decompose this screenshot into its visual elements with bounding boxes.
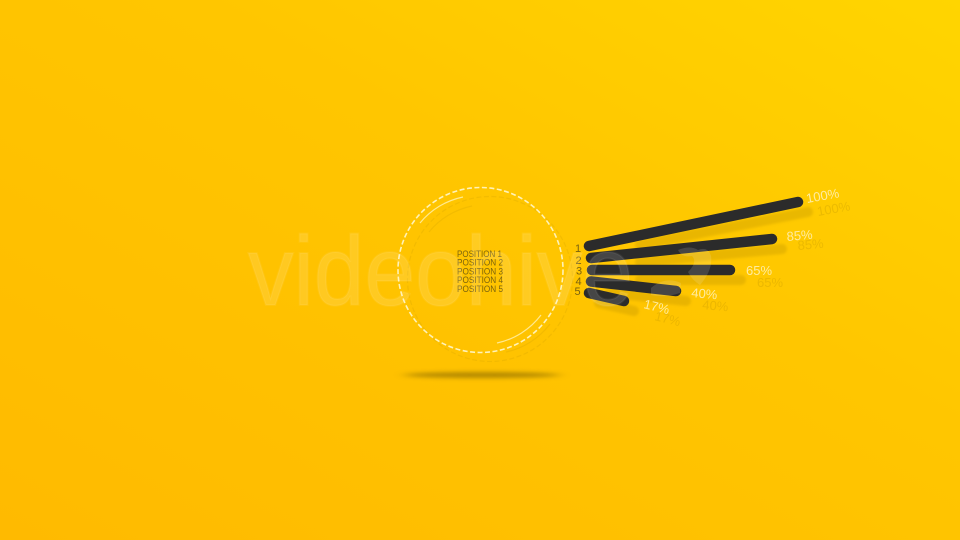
- percentage label shadows: 85%: [797, 236, 825, 253]
- inner arc top left: [420, 197, 463, 223]
- bar 5: 17%: [589, 293, 624, 301]
- percentage labels: 85%: [786, 227, 814, 244]
- percentage label shadows: 100%: [816, 198, 852, 219]
- bar numbers: 4: [576, 276, 582, 288]
- bar numbers: 5: [574, 286, 581, 298]
- percentage label shadows: 65%: [757, 275, 783, 290]
- position list: [457, 249, 503, 294]
- bar 3: 65%: [592, 265, 730, 275]
- inner arc shadows: [429, 206, 550, 352]
- bar 1: 100%: [589, 202, 798, 246]
- percentage labels: [642, 185, 841, 317]
- bar numbers: 2: [576, 255, 582, 267]
- bar numbers: [574, 243, 582, 298]
- watermark logo: [651, 248, 711, 296]
- percentage label shadows: [653, 198, 852, 329]
- inner arc bottom right: [497, 315, 541, 343]
- percentage labels: 65%: [746, 263, 772, 278]
- bar shadows: [599, 212, 808, 311]
- percentage label shadows: 40%: [702, 297, 729, 314]
- position list: POSITION 1: [457, 249, 502, 259]
- bar numbers: 3: [576, 266, 582, 278]
- percentage labels: 40%: [691, 285, 718, 302]
- position list: POSITION 3: [457, 266, 503, 276]
- circle shadow: [408, 196, 572, 362]
- bar 4: 40%: [591, 282, 676, 291]
- position list: POSITION 4: [457, 275, 503, 285]
- position list: POSITION 5: [457, 284, 503, 294]
- percentage labels: 17%: [642, 296, 672, 317]
- percentage labels: 100%: [805, 185, 841, 206]
- bar 2: 85%: [591, 239, 772, 258]
- percentage label shadows: 17%: [653, 308, 683, 329]
- watermark: videohive: [248, 216, 633, 326]
- circle graphic: [398, 188, 572, 362]
- position list: POSITION 2: [457, 258, 503, 268]
- bar chart: [589, 202, 798, 301]
- bar numbers: 1: [575, 243, 581, 255]
- dashed ring: [398, 188, 563, 352]
- ground shadow: [404, 372, 560, 378]
